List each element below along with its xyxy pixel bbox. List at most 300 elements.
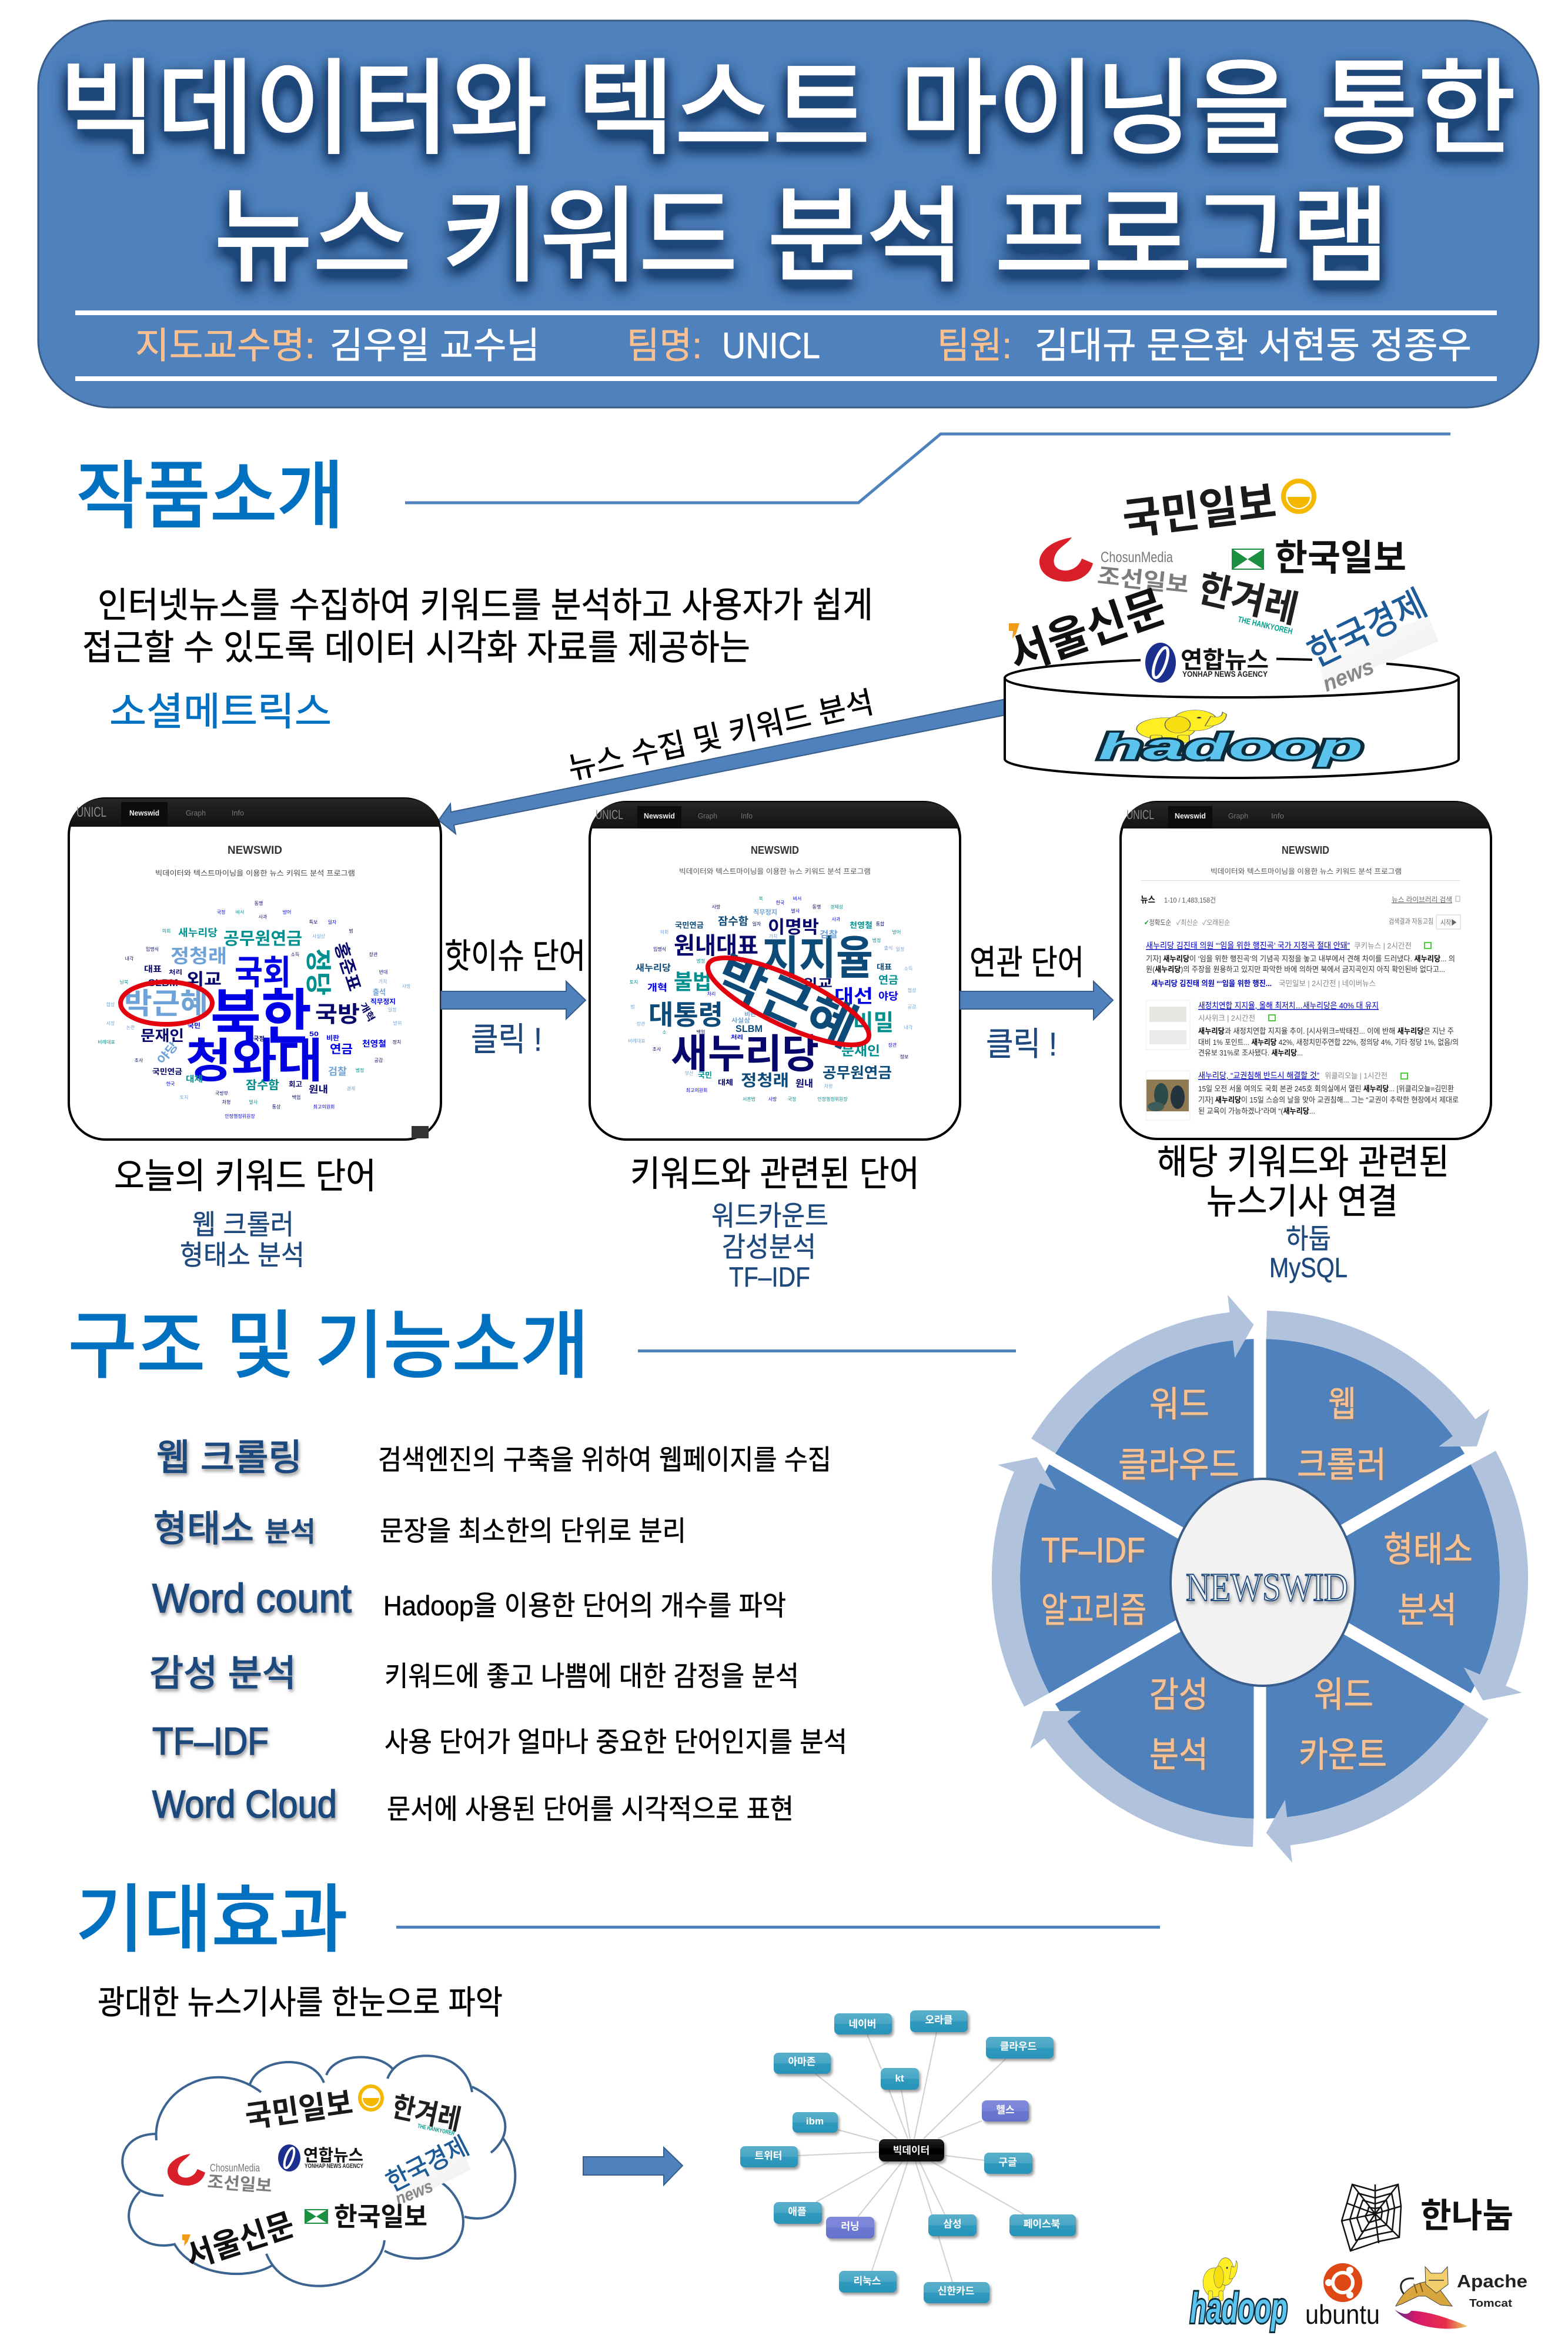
feature: web crawling: 검색엔진의 구축을 위하여 웹페이지를 수집	[378, 1444, 831, 1475]
word cloud: 공무원연금	[223, 929, 302, 948]
center node	[879, 2139, 944, 2161]
small words: 최고의원회	[686, 1087, 707, 1093]
cycle arrows	[913, 1246, 1568, 1912]
keyword nodes: ibm	[806, 2116, 824, 2127]
word cloud: 출석	[373, 988, 386, 997]
label: hot issue word: 핫이슈 단어	[444, 937, 586, 975]
small words: 법	[349, 928, 353, 934]
panel: related keyword word cloud	[590, 802, 960, 1140]
word cloud: 대표	[877, 963, 892, 971]
text block: introduction: 인터넷뉴스를 수집하여 키워드를 분석하고 사용자가 쉽게	[98, 586, 873, 625]
small words	[628, 896, 917, 1102]
small words: 한국	[776, 900, 784, 906]
small words: 국방부	[215, 1090, 228, 1096]
word cloud: 정청래	[741, 1072, 789, 1090]
small words: 통합	[876, 921, 885, 927]
logo: 연합뉴스	[1145, 643, 1269, 683]
small words: 남북	[120, 980, 128, 985]
panel: title banner	[38, 21, 1539, 407]
text block: introduction: 접근할 수 있도록 데이터 시각화 자료를 제공하는	[82, 628, 750, 667]
small words: 일자	[753, 921, 761, 927]
small words: 공감	[908, 1004, 917, 1010]
word cloud: 야당	[155, 1040, 180, 1067]
screenshot nav bar: Info	[1271, 811, 1284, 820]
small words: 백업	[697, 1029, 705, 1035]
logo: 한국경제: 한국경제	[382, 2132, 473, 2197]
logo: 한국경제: 한국경제	[1302, 583, 1433, 675]
feature list	[149, 1438, 847, 1826]
logo: 국민일보: 국민일보	[1120, 477, 1279, 544]
word cloud: 검찰	[328, 1066, 347, 1077]
small words: 가치	[379, 979, 387, 984]
screenshot nav bar: Newswid	[1175, 811, 1206, 820]
caption: panel one: 오늘의 키워드 단어	[114, 1157, 376, 1196]
small words: 시장	[106, 1020, 115, 1026]
small words: 사망	[768, 1096, 777, 1102]
small words: 일자	[328, 920, 337, 925]
title: 뉴스 키워드 분석 프로그램	[214, 179, 1390, 295]
word cloud: 국민연금	[675, 921, 704, 930]
small words: 장관	[369, 951, 378, 957]
logo: 국민일보: 국민일보	[243, 2086, 355, 2135]
small words: 특보	[309, 920, 317, 925]
logo: 연합뉴스	[278, 2144, 363, 2171]
keyword nodes: 신한카드	[938, 2286, 974, 2297]
word cloud: 처리	[731, 1034, 743, 1040]
feature: web crawling	[156, 1438, 831, 1478]
wheel labels: 클라우드	[1118, 1445, 1239, 1485]
screenshot heading: 빅데이터와 텍스트마이닝을 이용한 뉴스 키워드 분석 프로그램	[679, 867, 871, 876]
word cloud: 대선	[834, 986, 873, 1007]
small words: 백업	[292, 1094, 300, 1100]
text block: introduction	[82, 586, 873, 667]
logo: 한국일보: 한국일보	[1275, 538, 1406, 579]
feature: sentiment analysis: 감성 분석	[149, 1653, 296, 1694]
small words: 한국	[166, 1081, 175, 1087]
feature: morphological analysis	[153, 1509, 686, 1549]
word cloud: 국정	[253, 1035, 265, 1043]
screenshot nav bar: Info	[741, 811, 753, 820]
word cloud: 검찰	[820, 930, 838, 940]
small words: 토지	[630, 980, 638, 985]
word cloud	[636, 908, 898, 1090]
text: grasp news at a glance: 광대한 뉴스기사를 한눈으로 파악	[98, 1984, 503, 2021]
small words: 공감	[375, 1057, 383, 1063]
news item one: 새누리당 김진태 의원 “‘임을 위한 행진...	[1151, 979, 1272, 988]
word cloud: 천영철	[850, 921, 872, 930]
caption: panel two: 감성분석	[722, 1231, 816, 1262]
news item three: 15일 오전 서울 여의도 국회 본관 245호 회의실에서 열린 새누리당... [위클리오늘=김민환	[1198, 1084, 1454, 1093]
word cloud: 천영철	[362, 1039, 386, 1048]
title: 빅데이터와 텍스트 마이닝을 통한	[59, 52, 1516, 167]
arrow: news collection to panel one	[439, 699, 1005, 834]
wheel labels: 감성	[1149, 1675, 1208, 1715]
small words: 비서	[236, 910, 244, 915]
small words: 최고의원회	[313, 1104, 335, 1110]
small words: 경제	[347, 1085, 355, 1091]
feature: morphological analysis: 문장을 최소한의 단위로 분리	[380, 1515, 686, 1546]
small words: 안정행정위원장	[817, 1096, 848, 1102]
word cloud: 50	[309, 1031, 319, 1038]
keyword nodes: 삼성	[943, 2219, 962, 2230]
news item one: 새누리당 김진태 의원 “‘임을 위한 행진곡’ 국가 지정곡 절대 안돼”	[1146, 941, 1350, 950]
word cloud: 외교	[803, 977, 833, 990]
logo: 서울신문: 서울신문	[182, 2207, 299, 2275]
keyword nodes: 러닝	[841, 2221, 860, 2232]
small words: 부산	[685, 1070, 694, 1076]
small words: 국정	[217, 909, 225, 915]
caption: panel one: 웹 크롤러	[192, 1209, 294, 1240]
small words: 사과	[259, 914, 268, 920]
news item one: 쿠키뉴스 | 2시간전	[1354, 941, 1412, 950]
small words: 처형	[824, 1084, 833, 1089]
small words: 정치	[393, 1039, 401, 1045]
screenshot nav bar: Graph	[698, 811, 717, 820]
icon: elephant	[1203, 2258, 1238, 2301]
screenshot heading: 빅데이터와 텍스트마이닝을 이용한 뉴스 키워드 분석 프로그램	[1211, 867, 1402, 876]
small words: 일정	[388, 1007, 396, 1013]
feature: word cloud	[152, 1782, 794, 1826]
feature: word cloud: Word Cloud	[152, 1782, 337, 1826]
screenshot nav bar: UNICL	[76, 804, 106, 820]
wheel labels: 분석	[1149, 1735, 1208, 1775]
screenshot nav bar: Newswid	[644, 811, 675, 820]
news item one: 국민일보 | 2시간전 | 네이버뉴스	[1279, 979, 1376, 988]
team credits: UNICL	[722, 326, 820, 366]
word cloud: SLBM	[735, 1023, 763, 1034]
panel: related news article search	[1121, 802, 1491, 1139]
cloud outline	[122, 2056, 515, 2286]
small words: 임명식	[653, 946, 666, 952]
small words: 소득	[291, 952, 299, 957]
wheel labels: 워드	[1149, 1385, 1209, 1424]
news search toolbar	[1141, 895, 1460, 929]
small words: 반대	[379, 970, 387, 975]
logo: 조선일보: 조선일보	[1096, 564, 1190, 598]
wheel labels: 크롤러	[1297, 1445, 1386, 1485]
keyword nodes: 클라우드	[1000, 2041, 1037, 2052]
word cloud: 대표	[144, 964, 162, 974]
logo: hadoop	[1098, 710, 1363, 767]
logo: 서울신문: 서울신문	[1002, 582, 1172, 681]
word cloud: 사실상	[731, 1017, 750, 1024]
small words: 협상	[908, 987, 917, 993]
word cloud: 정당	[303, 948, 332, 995]
word cloud: 회고	[289, 1080, 302, 1088]
wheel labels: TF–IDF	[1041, 1531, 1145, 1570]
small words: 의회	[660, 929, 668, 935]
news item three: 새누리당, “교권침해 반드시 해결할 것”	[1198, 1071, 1319, 1080]
word cloud: 이명박	[768, 918, 819, 937]
word cloud: 대체	[186, 1074, 203, 1084]
word cloud: 불법	[674, 970, 711, 994]
word cloud: 국회	[235, 954, 291, 992]
small words: 비례대표	[98, 1039, 115, 1045]
caption: panel three: 하둡	[1286, 1223, 1331, 1254]
logo: 연합뉴스: YONHAP NEWS AGENCY	[305, 2163, 363, 2170]
team credits: 김대규 문은환 서현동 정종우	[1035, 326, 1472, 366]
word cloud: 직무정지	[753, 908, 777, 916]
icon: feather	[1395, 2310, 1467, 2328]
word cloud: 국민	[698, 1071, 712, 1080]
word cloud: 개혁	[647, 983, 667, 993]
diagram: NEWSWID process wheel	[913, 1246, 1568, 1912]
news item two: 대비 1% 포인트... 새누리당 42%, 새정치민주연합 22%, 정의당 4%, 기타 정당 1%, 없음/의	[1198, 1038, 1459, 1047]
news item two	[1146, 1000, 1459, 1057]
logo: 한국경제: news	[1319, 654, 1378, 697]
feature: tf-idf: 사용 단어가 얼마나 중요한 단어인지를 분석	[385, 1726, 847, 1758]
word cloud: 잠수함	[246, 1078, 279, 1092]
caption: panel three	[1157, 1142, 1449, 1283]
keyword nodes: 리눅스	[854, 2276, 881, 2287]
caption: panel one: 형태소 분석	[180, 1240, 305, 1271]
logo: ubuntu: ubuntu	[1305, 2299, 1380, 2330]
keyword nodes: 트위터	[755, 2150, 782, 2161]
hub: NEWSWID	[1171, 1479, 1355, 1686]
small words: 동맹	[255, 900, 263, 906]
heading: 기대효과: 기대효과	[76, 1879, 347, 1961]
screenshot heading	[679, 844, 871, 876]
small words: 국정	[788, 1096, 796, 1102]
caption: panel three: 뉴스기사 연결	[1206, 1182, 1398, 1221]
caption: panel two: 워드카운트	[711, 1200, 828, 1231]
label: related word: 연관 단어	[969, 944, 1084, 982]
news item one: 원(새누리당)의 주장을 원용하고 있지만 파악한 바에 의하면 북에서 금지곡인지 아직 확인된바 없다고...	[1146, 965, 1445, 974]
screenshot nav bar	[69, 799, 441, 835]
logo: 연합뉴스: 연합뉴스	[303, 2146, 363, 2164]
word cloud: 원내	[795, 1078, 813, 1089]
feature: word count: Word count	[152, 1575, 352, 1621]
small words: 비서	[793, 896, 801, 901]
logo: 한나눔: 한나눔	[1420, 2197, 1513, 2235]
logo: ubuntu	[1305, 2263, 1380, 2330]
panel: today's keyword word cloud	[69, 799, 441, 1140]
icon: elephant	[1136, 710, 1226, 743]
small words: 소	[662, 1030, 667, 1035]
logo: hadoop: hadoop	[1190, 2285, 1288, 2332]
word cloud: 지지율	[762, 932, 873, 984]
word cloud: 새누리당	[636, 963, 671, 973]
word cloud: 대통령	[648, 1000, 723, 1030]
feature: word count	[152, 1575, 786, 1621]
word cloud: 개혁	[357, 1001, 377, 1024]
small words: 사망	[712, 904, 721, 910]
small words: 사과	[832, 917, 841, 922]
screenshot nav bar	[1121, 802, 1491, 837]
small words: 방어	[892, 929, 901, 935]
word cloud: 새누리당	[671, 1032, 819, 1077]
screenshot nav bar: UNICL	[596, 807, 623, 822]
word cloud: 원내대표	[674, 933, 758, 959]
screenshot heading	[1141, 844, 1460, 881]
word cloud: 원내	[309, 1084, 328, 1095]
word cloud: 청와대	[186, 1035, 323, 1087]
news item two: 시사위크 | 2시간전	[1198, 1014, 1255, 1023]
news search toolbar: 시작▶	[1440, 918, 1457, 927]
small words: 일정	[896, 946, 904, 952]
small words: 장관	[888, 1042, 897, 1048]
news search toolbar: 검색결과 자동고침	[1389, 917, 1433, 926]
caption: panel three: MySQL	[1269, 1252, 1348, 1283]
small words: 법정	[356, 1067, 364, 1073]
screenshot heading: NEWSWID	[228, 844, 282, 857]
keyword nodes: 아마존	[788, 2056, 815, 2067]
keyword nodes: 페이스북	[1024, 2219, 1060, 2230]
small words: 처형	[222, 1100, 230, 1105]
label: click: 클릭 !	[986, 1025, 1057, 1063]
caption: panel two	[630, 1154, 920, 1292]
news item three: 된 교육이 가능하겠나”라며 “(새누리당...	[1198, 1107, 1315, 1115]
heading: 구조 및 기능소개: 구조 및 기능소개	[68, 1305, 589, 1387]
team credits: 지도교수명:	[135, 326, 315, 366]
news search toolbar: ✓최신순	[1176, 918, 1198, 927]
cylinder	[1005, 659, 1459, 778]
small words: 정보	[900, 1054, 908, 1060]
small words: 발사	[249, 1099, 258, 1105]
word cloud: 북한	[210, 984, 312, 1051]
wheel labels: 워드	[1314, 1675, 1373, 1715]
word cloud: 직무정지	[370, 998, 396, 1005]
hub: NEWSWID: NEWSWID	[1186, 1565, 1348, 1609]
small words: 토지	[180, 1095, 188, 1100]
news search toolbar: ✓오래된순	[1202, 918, 1230, 927]
small words: 처리	[707, 991, 716, 997]
keyword nodes: 오라클	[925, 2014, 952, 2026]
screenshot nav bar	[590, 802, 960, 837]
small words	[98, 900, 411, 1119]
screenshot nav bar: Graph	[186, 808, 206, 817]
arrow: to keyword network	[583, 2147, 683, 2185]
keyword nodes: 애플	[788, 2206, 807, 2217]
news item one	[1146, 941, 1455, 988]
small words: 안정행정위원장	[225, 1113, 255, 1119]
feature: word count: Hadoop을 이용한 단어의 개수를 파악	[383, 1590, 786, 1621]
word cloud: 비밀	[853, 1011, 894, 1035]
logo: 한겨레: THE HANKYOREH	[417, 2123, 455, 2137]
screenshot heading	[155, 844, 355, 877]
small words: 내각	[904, 1024, 913, 1030]
keyword nodes: 네이버	[849, 2019, 876, 2030]
icon: tomcat	[1396, 2267, 1452, 2306]
logo: 조선일보	[168, 2154, 273, 2196]
heading: 작품소개: 작품소개	[76, 456, 344, 537]
word cloud: 잠수함	[718, 916, 748, 927]
small words: 동맹	[813, 904, 821, 910]
word cloud: 새누리당	[178, 927, 218, 938]
screenshot heading: NEWSWID	[1282, 844, 1329, 856]
feature: morphological analysis: 형태소	[153, 1509, 254, 1549]
team credits: 팀원:	[937, 326, 1012, 366]
small words: 사망	[402, 983, 411, 989]
highlight: red ellipse	[121, 982, 212, 1024]
small words: 임명식	[146, 946, 159, 952]
small words: 조사	[135, 1058, 143, 1063]
logo: apache tomcat: Tomcat	[1469, 2297, 1512, 2309]
feature: tf-idf	[152, 1719, 847, 1763]
wheel labels	[1041, 1385, 1473, 1775]
word cloud: 박근혜	[124, 987, 208, 1020]
small words: 출석	[884, 945, 892, 951]
highlight: red ellipse	[698, 942, 879, 1061]
word cloud: 야당	[878, 991, 898, 1002]
feature: web crawling: 웹 크롤링	[156, 1438, 302, 1478]
database: news sources on hadoop	[1002, 477, 1459, 778]
news item three: 기자] 새누리당이 15일 스승의 날을 맞아 교권침해... 그는 “교권이 추락한 현장에서 제대로	[1198, 1095, 1459, 1104]
word cloud: 공무원연금	[823, 1065, 892, 1081]
news item three	[1146, 1071, 1459, 1120]
small words: 방어	[283, 909, 291, 915]
small words: 방위	[393, 1020, 402, 1026]
team credits	[135, 326, 1472, 366]
small words: 논란	[126, 1024, 135, 1030]
news item two: 견유보 31%로 조사됐다. 새누리당...	[1198, 1048, 1303, 1057]
center node: 빅데이터	[893, 2145, 930, 2156]
word cloud: 비판	[744, 1011, 757, 1017]
logo: 조선일보: ChosunMedia	[210, 2162, 260, 2174]
screenshot nav bar: Newswid	[129, 808, 159, 817]
word cloud: 연금	[878, 974, 898, 986]
small words: 법정	[872, 937, 881, 943]
word cloud: 비판	[326, 1034, 339, 1042]
word cloud: 국민연금	[152, 1067, 182, 1076]
news item three: 위클리오늘 | 1시간전	[1325, 1071, 1388, 1080]
screenshot heading: 빅데이터와 텍스트마이닝을 이용한 뉴스 키워드 분석 프로그램	[155, 869, 355, 877]
caption: panel two: TF–IDF	[729, 1261, 810, 1292]
small words: 서훈법	[743, 1096, 755, 1102]
small words: 법정	[697, 958, 705, 964]
news search toolbar: ✔정확도순	[1144, 918, 1171, 927]
feature: morphological analysis: 분석	[265, 1516, 316, 1547]
feature: tf-idf: TF–IDF	[152, 1719, 269, 1763]
keyword nodes	[740, 2010, 1076, 2303]
news search toolbar: 뉴스	[1141, 895, 1155, 905]
word cloud: 대체	[718, 1078, 733, 1087]
word cloud: 처리	[169, 969, 182, 976]
arrow: to related words	[441, 981, 586, 1019]
logo: apache tomcat	[1395, 2267, 1527, 2328]
caption: panel two: 키워드와 관련된 단어	[630, 1154, 920, 1194]
logo: 조선일보	[1039, 537, 1190, 598]
keyword nodes: 헬스	[996, 2104, 1015, 2116]
logo: 연합뉴스: 연합뉴스	[1181, 647, 1269, 673]
screenshot nav bar: Graph	[1228, 811, 1248, 820]
keyword nodes: kt	[895, 2073, 904, 2084]
word cloud: SLBM	[148, 977, 178, 988]
screenshot heading: NEWSWID	[751, 844, 799, 856]
wheel labels: 형태소	[1383, 1530, 1473, 1569]
news search toolbar: 1-10 / 1,483,158건	[1164, 896, 1216, 904]
news item two: 새누리당과 새정치연합 지지율 추이. [시사위크=박태진... 이에 반해 새누리당은 지난 주	[1198, 1027, 1454, 1035]
feature: sentiment analysis	[149, 1653, 799, 1694]
label: click: 클릭 !	[471, 1021, 542, 1058]
small words: 소득	[904, 966, 912, 971]
logo: 한겨레: 한겨레	[1194, 567, 1302, 631]
wheel labels: 분석	[1398, 1591, 1457, 1630]
small words: 발사	[791, 908, 800, 914]
word cloud: 외교	[186, 970, 222, 988]
word cloud: 정청래	[170, 946, 227, 967]
keyword nodes: 구글	[998, 2157, 1017, 2168]
small words: 국방부	[738, 958, 751, 964]
title	[59, 52, 1516, 295]
logo: 한국경제: news	[393, 2177, 436, 2209]
small words: 통상	[272, 1104, 281, 1110]
logo: 한국일보: 한국일보	[334, 2203, 427, 2231]
small words: 조사	[653, 1047, 661, 1052]
caption: panel three: 해당 키워드와 관련된	[1157, 1142, 1449, 1182]
news search toolbar: 뉴스 라이브러리 검색	[1392, 896, 1452, 904]
large keyword: 박근혜	[708, 946, 865, 1057]
